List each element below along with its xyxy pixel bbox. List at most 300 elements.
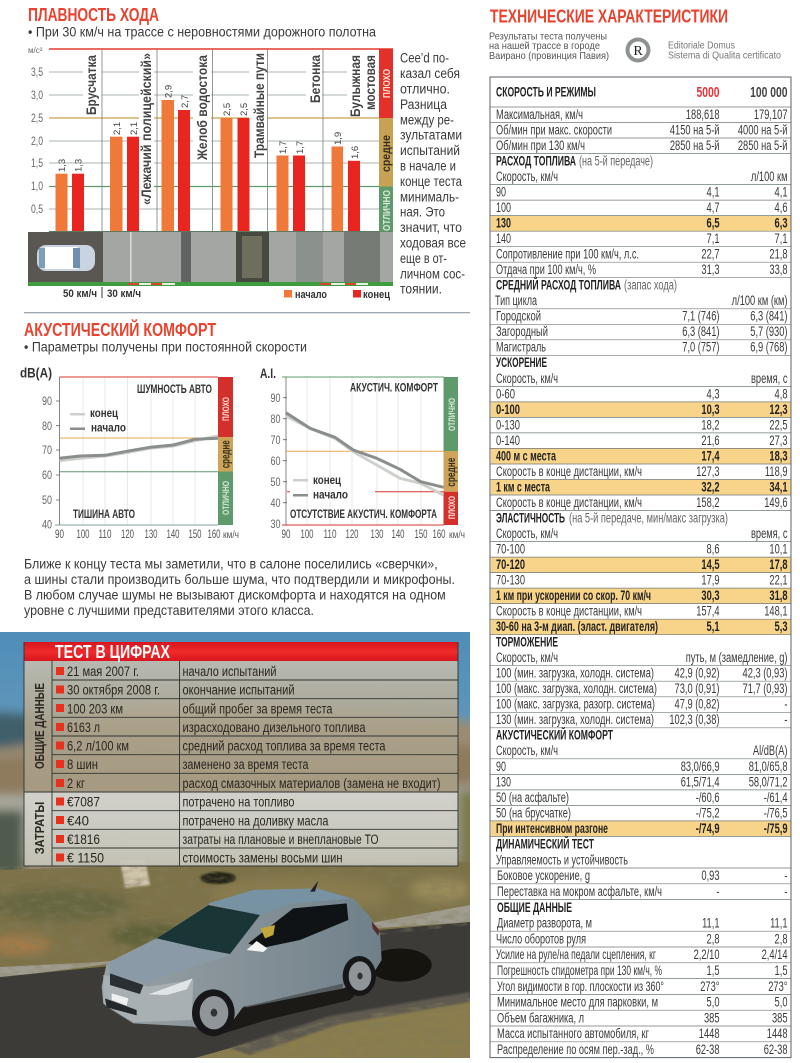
comfort captions: АКУСТИЧ. КОМФОРТ: [350, 381, 438, 395]
noise x axis: 130: [144, 529, 158, 541]
section: braking: 130 (мин. загрузка, холодн. система): [496, 712, 654, 727]
section: average fuel consumption: [495, 278, 788, 355]
section: fuel consumption: 6,5: [707, 217, 720, 231]
section: average fuel consumption: Магистраль: [496, 340, 546, 355]
text block: ride comment: отлично.: [400, 82, 450, 96]
rating scale bar: ПЛОХО: [381, 69, 393, 98]
section: elasticity: 70-120: [496, 557, 525, 572]
section: dynamic test: Переставка на мокром асфальте, км/ч: [497, 884, 662, 899]
speed labels: 30 км/ч: [107, 288, 141, 300]
section: average fuel consumption: л/100 км (км): [732, 295, 788, 309]
y axis labels: 1,0: [31, 181, 43, 193]
section: average fuel consumption: 6,3 (841): [750, 310, 788, 324]
bar values: 2,9: [164, 85, 174, 98]
comfort x axis: [282, 529, 465, 541]
noise legend: конец: [90, 406, 118, 420]
text block: ride comment: ная. Это: [400, 205, 445, 220]
noise curves: [60, 436, 218, 461]
bar values: 1,9: [333, 132, 344, 145]
bar values: 1,7: [278, 141, 289, 154]
bar values: 1,7: [295, 141, 306, 154]
values column: € 1150: [67, 851, 104, 866]
noise captions: ШУМНОСТЬ АВТО: [137, 382, 212, 396]
bar values: 1,3: [57, 159, 68, 172]
section: braking: путь, м (замедление, g): [686, 652, 788, 666]
comfort rating scale: [444, 377, 458, 525]
text block: ride comment: казал себя: [400, 66, 460, 81]
text block: ride comment: минималь-: [400, 189, 459, 204]
noise rating scale: средне: [220, 440, 232, 468]
noise y axis: 40: [42, 520, 52, 532]
values column: 21 мая 2007 г.: [67, 664, 139, 679]
section: speed and modes: 179,107: [754, 108, 788, 122]
section: elasticity: Скорость, км/ч: [496, 526, 558, 541]
section: fuel consumption: [496, 154, 788, 278]
values column: 30 октября 2008 г.: [67, 683, 160, 698]
section: elasticity: (на 5-й передаче, мин/макс загрузка): [569, 510, 728, 525]
section: fuel consumption: 7,1: [775, 233, 788, 247]
section: acceleration: 12,3: [769, 403, 788, 417]
road strip illustration: [28, 232, 393, 286]
section: elasticity: 70-130: [496, 572, 525, 588]
values column: 6,2 л/100 км: [67, 739, 129, 754]
descriptions column: расход смазочных материалов (замена не входит): [182, 776, 440, 791]
comfort y axis: 30: [270, 519, 280, 531]
noise legend: начало: [91, 421, 126, 435]
photo: grass slope: [0, 860, 470, 978]
section: elasticity: 17,9: [701, 574, 720, 588]
section: general data: 1448: [699, 1028, 720, 1042]
section: braking: 42,9 (0,92): [675, 667, 720, 681]
noise x axis: [55, 529, 239, 541]
section: general data: 385: [772, 1012, 788, 1026]
icon: certification seal: [626, 38, 650, 62]
values column: 8 шин: [67, 757, 98, 772]
legend: bars: начало: [295, 289, 327, 301]
legend: bars: [284, 289, 390, 301]
bar values: 2,1: [112, 122, 123, 135]
section: fuel consumption: 6,3: [775, 217, 788, 231]
section: general data: 1448: [767, 1028, 788, 1042]
section: elasticity: 17,8: [769, 559, 788, 572]
comfort x axis: 130: [370, 529, 384, 541]
section: acceleration: 27,3: [769, 434, 788, 448]
section: speed and modes: СКОРОСТЬ И РЕЖИМЫ: [496, 84, 596, 100]
section: speed and modes: 100 000: [750, 83, 788, 100]
comfort x axis: 160: [432, 529, 446, 541]
noise x axis: 160: [208, 529, 220, 541]
section: acoustic comfort: -/61,4: [764, 791, 788, 805]
section: general data: Угол видимости в гор. плоскости из 360°: [497, 979, 664, 994]
table: test in figures: [24, 642, 458, 866]
descriptions column: потрачено на топливо: [182, 795, 294, 810]
section: average fuel consumption: 7,1 (746): [682, 310, 720, 324]
values column: €40: [67, 813, 89, 828]
section: fuel consumption: 100: [496, 200, 511, 215]
heading: ride smoothness: ПЛАВНОСТЬ ХОДА: [28, 5, 159, 25]
text block: acoustic comment: [24, 555, 455, 618]
road surface labels: «Лежачий полицейский»: [138, 53, 154, 205]
road surface labels: Брусчатка: [83, 55, 99, 115]
section: general data: 273°: [700, 980, 720, 994]
section: fuel consumption: РАСХОД ТОПЛИВА: [496, 154, 576, 168]
text block: ride comment: тоянии.: [400, 282, 442, 297]
y axis labels: 2,0: [31, 136, 43, 148]
section: fuel consumption: л/100 км: [751, 171, 788, 184]
section: general data: Число оборотов руля: [496, 931, 586, 946]
section: elasticity: время, с: [751, 528, 788, 541]
speed labels: 50 км/ч: [63, 288, 97, 300]
speed labels: [63, 287, 141, 300]
section: fuel consumption: 90: [496, 184, 506, 200]
section: general data: 11,1: [702, 917, 720, 931]
noise y axis: 90: [42, 396, 52, 408]
section: fuel consumption: 4,1: [707, 186, 720, 200]
noise x axis: 120: [121, 529, 134, 541]
bar values: 2,7: [180, 95, 191, 108]
section: speed and modes: 5000: [696, 83, 720, 100]
chart: noise dB(A): dB(A): [20, 365, 52, 381]
section: speed and modes: Максимальная, км/ч: [496, 107, 583, 122]
section: acceleration: Скорость в конце дистанции, км/ч: [496, 495, 642, 510]
section: dynamic test: [496, 837, 788, 899]
section: braking: 100 (макс. загрузка, холодн. система): [496, 681, 657, 696]
section: general data: 2,8: [707, 933, 720, 947]
section: elasticity: Скорость в конце дистанции, км/ч: [496, 604, 642, 619]
chart: acoustic index A.I.: [260, 365, 465, 541]
section: general data: 2,2/10: [694, 949, 720, 963]
section: general data: 273°: [768, 980, 788, 994]
noise y axis: 70: [42, 445, 52, 457]
section: general data: 62-38: [764, 1044, 788, 1057]
section: acceleration: Скорость, км/ч: [496, 371, 558, 386]
section: acceleration: 118,9: [765, 465, 788, 479]
section: fuel consumption: 130: [496, 216, 511, 231]
section: braking: -: [784, 698, 788, 712]
comfort x axis: 90: [282, 529, 290, 541]
section: fuel consumption: 7,1: [707, 233, 720, 247]
section: elasticity: 70-100: [496, 542, 525, 556]
comfort y axis: 60: [270, 456, 280, 468]
section: dynamic test: -: [784, 886, 788, 899]
text block: certification: Editoriale Domus: [668, 41, 735, 52]
section: general data: 1,5: [707, 965, 720, 978]
comfort legend: конец: [313, 473, 341, 487]
section: general data: [496, 900, 788, 1057]
section: average fuel consumption: Тип цикла: [495, 293, 537, 308]
section: general data: 1,5: [775, 965, 788, 978]
section: general data: ОБЩИЕ ДАННЫЕ: [497, 900, 572, 915]
comfort y axis: 90: [270, 393, 280, 405]
section: dynamic test: 0,93: [701, 870, 720, 884]
section: acoustic comfort: 61,5/71,4: [681, 776, 720, 790]
section: acceleration: 4,3: [707, 388, 720, 402]
section: acceleration: 1 км с места: [496, 479, 550, 494]
descriptions column: общий пробег за время теста: [182, 701, 333, 716]
section: fuel consumption: Сопротивление при 100 км/ч, л.с.: [496, 247, 639, 262]
section: general data: 62-38: [696, 1044, 720, 1057]
section: elasticity: 148,1: [764, 605, 788, 619]
comfort rating scale: ОТЛИЧНО: [447, 398, 458, 431]
text block: acoustic comment: В любом случае шумы не вызывают дискомфорта и находятся на одном: [24, 586, 446, 602]
chart: ride smoothness bars: [28, 46, 393, 232]
section: speed and modes: [496, 83, 788, 153]
text block: test location: Ваирано (провинция Павия): [489, 50, 609, 62]
section: fuel consumption: (на 5-й передаче): [579, 154, 653, 168]
comfort curves: [286, 413, 444, 495]
section: braking: [496, 635, 788, 728]
section: elasticity: 30,3: [701, 590, 720, 603]
comfort captions: ОТСУТСТВИЕ АКУСТИЧ. КОМФОРТА: [290, 507, 437, 521]
section: fuel consumption: 4,1: [775, 186, 788, 200]
section: braking: 42,3 (0,93): [743, 667, 788, 681]
section: dynamic test: -: [784, 870, 788, 884]
chart: noise dB(A): [20, 365, 239, 541]
noise x axis: 110: [98, 529, 112, 541]
section: fuel consumption: 31,3: [701, 264, 720, 278]
noise rating scale: [218, 377, 233, 525]
noise legend: [70, 406, 126, 435]
section: acceleration: 400 м с места: [496, 448, 556, 463]
section: braking: 47,9 (0,82): [675, 698, 720, 712]
section: fuel consumption: 4,6: [775, 202, 788, 215]
descriptions column: начало испытаний: [182, 664, 276, 679]
text block: certification: [668, 41, 781, 62]
section: braking: 73,0 (0,91): [675, 683, 720, 697]
section: braking: Скорость, км/ч: [496, 650, 558, 665]
noise x axis: 90: [55, 529, 64, 541]
section: speed and modes: 2850 на 5-й: [670, 140, 720, 153]
values column: €1816: [67, 832, 100, 847]
section: acoustic comfort: [496, 728, 788, 836]
section: general data: 11,1: [770, 917, 788, 931]
heading: ride smoothness: [28, 5, 376, 40]
text block: ride comment: Cee’d по-: [400, 51, 449, 66]
table title: ТЕСТ В ЦИФРАХ: [55, 642, 170, 662]
bar values: 2,5: [222, 103, 233, 116]
comfort x axis: 100: [300, 529, 314, 541]
section: fuel consumption: Отдача при 100 км/ч, %: [496, 262, 596, 277]
noise y axis: 50: [42, 495, 52, 507]
noise x axis: 140: [166, 529, 180, 541]
section: acceleration: 158,2: [696, 496, 720, 510]
road surface labels: [83, 53, 378, 205]
y axis labels: 3,5: [31, 67, 43, 79]
section: elasticity: 8,6: [707, 543, 720, 557]
noise x axis: 150: [188, 529, 202, 541]
section: average fuel consumption: 6,9 (768): [750, 341, 788, 355]
noise rating scale: ПЛОХО: [221, 397, 232, 421]
bar values: 1,3: [74, 159, 84, 172]
section: general data: 2,8: [775, 933, 788, 947]
bar values: 2,1: [129, 122, 140, 135]
descriptions column: затраты на плановые и внеплановые ТО: [182, 832, 378, 847]
section: acceleration: 21,6: [701, 434, 720, 448]
comfort x axis: 110: [324, 529, 336, 541]
values column: €7087: [67, 795, 100, 810]
section: elasticity: 5,1: [707, 621, 720, 635]
section: acoustic comfort: -/75,2: [696, 807, 720, 821]
section: fuel consumption: Скорость, км/ч: [496, 169, 558, 184]
section: general data: Диаметр разворота, м: [497, 916, 592, 931]
section: acceleration: 4,8: [775, 388, 788, 402]
section: general data: 385: [704, 1012, 720, 1026]
bullets: [56, 667, 64, 862]
section: acoustic comfort: -/74,9: [696, 822, 720, 836]
section: speed and modes: 2850 на 5-й: [738, 140, 788, 153]
section: general data: Минимальное место для парковки, м: [497, 995, 658, 1010]
comfort rating scale: средне: [446, 458, 458, 487]
section: average fuel consumption: Загородный: [496, 324, 548, 339]
section: fuel consumption: 4,7: [707, 202, 720, 215]
text block: acoustic comment: уровне с лучшими представителями этого класса.: [24, 602, 314, 618]
section: general data: Масса испытанного автомобиля, кг: [497, 1026, 649, 1041]
bar values: 1,6: [350, 146, 361, 159]
section: acceleration: 34,1: [769, 481, 788, 495]
road surface labels: Бетонка: [307, 55, 323, 103]
chart: acoustic index A.I.: A.I.: [260, 365, 276, 381]
section: acoustic comfort: 50 (на асфальте): [496, 790, 569, 805]
noise y axis: 80: [42, 421, 52, 433]
section: general data: Погрешность спидометра при 130 км/ч, %: [497, 963, 662, 978]
y axis labels: 1,5: [31, 158, 43, 170]
section: general data: Усилие на руле/на педали сцепления, кг: [496, 947, 656, 962]
section: acceleration: 149,6: [764, 496, 788, 510]
y axis labels: 2,5: [31, 113, 43, 125]
icon: car from above: [37, 245, 95, 271]
section label: general data: ОБЩИЕ ДАННЫЕ: [32, 683, 47, 769]
descriptions column: [182, 664, 440, 866]
road surface labels: Булыжная: [347, 55, 363, 117]
rating scale bar: [379, 49, 393, 232]
bars: start and end values: [56, 100, 360, 231]
text block: ride comment: [400, 51, 466, 297]
section: acceleration: 0-140: [496, 433, 520, 448]
road surface labels: Желоб водостока: [194, 55, 210, 161]
text block: ride comment: Разница: [400, 97, 447, 112]
comfort rating scale: ПЛОХО: [447, 496, 458, 519]
section: dynamic test: Управляемость и устойчивость: [496, 852, 628, 867]
comfort x axis: 120: [346, 529, 358, 541]
comfort y axis: 50: [270, 477, 280, 489]
values column: 100 203 км: [67, 701, 123, 716]
values column: 6163 л: [67, 720, 100, 735]
text block: certification: Sistema di Qualita certificato: [668, 51, 781, 62]
section: braking: -: [784, 714, 788, 728]
descriptions column: заменено за время теста: [182, 757, 309, 772]
section: average fuel consumption: СРЕДНИЙ РАСХОД ТОПЛИВА: [496, 278, 621, 293]
text block: test location: [489, 30, 609, 62]
section: acoustic comfort: 58,0/71,2: [749, 776, 788, 790]
text block: ride comment: конце теста: [400, 174, 462, 189]
section: acoustic comfort: -/75,9: [764, 822, 788, 836]
section: elasticity: 22,1: [769, 574, 788, 588]
section: acoustic comfort: АКУСТИЧЕСКИЙ КОМФОРТ: [496, 728, 613, 743]
heading: technical specifications: ТЕХНИЧЕСКИЕ ХАРАКТЕРИСТИКИ: [490, 7, 728, 27]
section: acoustic comfort: -/76,5: [764, 807, 788, 821]
section: braking: ТОРМОЖЕНИЕ: [496, 635, 558, 650]
section: elasticity: 157,4: [696, 605, 720, 619]
text block: ride comment: в начале и: [400, 158, 456, 174]
section: acceleration: 32,2: [701, 481, 720, 495]
section: speed and modes: 4000 на 5-й: [738, 124, 788, 138]
heading: acoustic comfort: [24, 319, 307, 355]
y axis labels: 0,5: [31, 204, 43, 216]
road surface labels: Трамвайные пути: [251, 53, 267, 158]
section: fuel consumption: 33,8: [769, 264, 788, 278]
text block: ride comment: ходовая все: [400, 236, 466, 250]
section: acoustic comfort: 130: [496, 774, 511, 789]
section: fuel consumption: 140: [496, 231, 511, 246]
bar values: 2,5: [239, 103, 250, 116]
section: acceleration: 22,5: [769, 419, 788, 433]
section: braking: 102,3 (0,38): [669, 714, 720, 728]
section: dynamic test: ДИНАМИЧЕСКИЙ ТЕСТ: [496, 837, 594, 852]
text block: acoustic comment: Ближе к концу теста мы заметили, что в салоне поселились «сверчки»,: [24, 555, 438, 571]
noise captions: ТИШИНА АВТО: [73, 507, 135, 521]
text block: acoustic comment: а шины стали производить больше шума, что подтвердили и микрофоны.: [24, 571, 455, 587]
section: fuel consumption: 22,7: [701, 248, 720, 262]
y axis labels: [31, 67, 43, 216]
descriptions column: окончание испытаний: [182, 683, 294, 698]
text block: ride comment: еще в от-: [400, 251, 447, 266]
heading: acoustic comfort: • Параметры получены при постоянной скорости: [24, 340, 307, 355]
comfort legend: [293, 473, 348, 502]
section: elasticity: 10,1: [769, 543, 788, 557]
text block: ride comment: испытаний: [400, 143, 460, 158]
section: average fuel consumption: 5,7 (930): [750, 326, 788, 340]
section: acceleration: 0-100: [496, 402, 520, 417]
section: average fuel consumption: 6,3 (841): [682, 326, 720, 340]
section label: costs: ЗАТРАТЫ: [32, 802, 47, 854]
section: acoustic comfort: Al/dB(A): [753, 745, 788, 759]
photo: car on mountain road: [0, 632, 480, 1060]
text block: ride comment: личном сос-: [400, 266, 465, 281]
section: acoustic comfort: Скорость, км/ч: [496, 743, 558, 758]
heading: acoustic comfort: АКУСТИЧЕСКИЙ КОМФОРТ: [24, 319, 216, 340]
noise x axis: км/ч: [223, 530, 239, 541]
section: elasticity: ЭЛАСТИЧНОСТЬ: [496, 510, 565, 525]
section: elasticity: 1 км при ускорении со скор. 70 км/ч: [496, 588, 651, 603]
bar values: [57, 85, 361, 172]
section: average fuel consumption: 7,0 (757): [682, 341, 720, 355]
text block: test location: Результаты теста получены: [489, 30, 607, 42]
section: speed and modes: 4150 на 5-й: [670, 124, 720, 138]
chart: ride smoothness bars: м/с²: [28, 46, 43, 55]
comfort y axis: 70: [270, 435, 280, 447]
photo: asphalt road: [0, 860, 470, 1060]
section: dynamic test: -: [716, 886, 720, 899]
section: acceleration: 127,3: [696, 465, 720, 479]
section: braking: 100 (мин. загрузка, холодн. система): [496, 666, 654, 681]
section: acceleration: 10,3: [701, 403, 720, 417]
section: acoustic comfort: 50 (на брусчатке): [496, 805, 571, 820]
section: braking: 100 (макс. загрузка, разогр. система): [496, 697, 655, 712]
descriptions column: потрачено на доливку масла: [182, 813, 329, 828]
icon: certification seal: R: [633, 44, 643, 59]
photo: car: [102, 881, 432, 1037]
rating scale bar: средне: [379, 135, 393, 172]
comfort x axis: 140: [392, 529, 404, 541]
descriptions column: стоимость замены восьми шин: [182, 851, 342, 866]
section: speed and modes: Об/мин при 130 км/ч: [496, 138, 585, 153]
table: technical specifications: [490, 77, 791, 1058]
text block: test location: на нашей трассе в городе: [489, 40, 600, 52]
text block: ride comment: зультатами: [400, 128, 462, 143]
comfort y axis: 80: [270, 414, 280, 426]
section: braking: 71,7 (0,93): [743, 683, 788, 697]
section: acceleration: Скорость в конце дистанции, км/ч: [496, 464, 642, 479]
